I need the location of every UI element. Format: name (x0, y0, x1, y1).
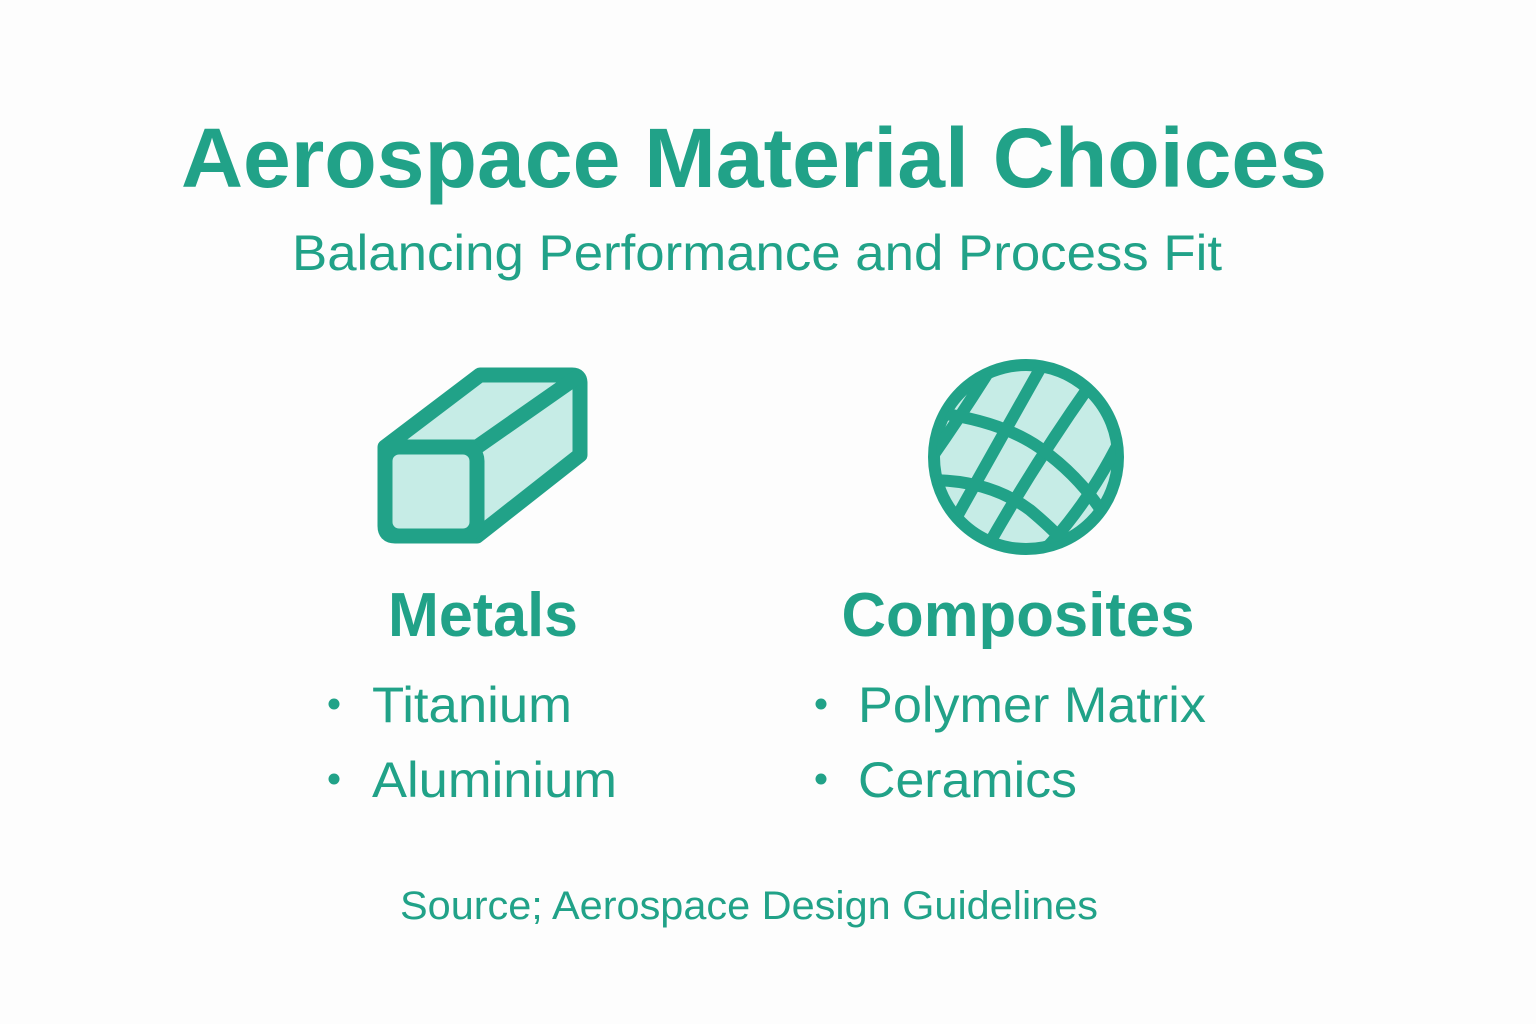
list: composites: Ceramics (858, 752, 1077, 808)
list: metals: Titanium (372, 677, 572, 733)
icon: composite globe (930, 360, 1120, 560)
list: metals (328, 677, 617, 808)
source: Source; Aerospace Design Guidelines (400, 884, 1098, 928)
icon: metal bar (385, 375, 580, 536)
list: metals: Aluminium (372, 752, 617, 808)
list: composites: Polymer Matrix (858, 677, 1206, 733)
heading: Metals: Metals (388, 581, 578, 650)
title: Aerospace Material Choices (181, 111, 1327, 205)
list: composites (816, 677, 1206, 808)
subtitle: Balancing Performance and Process Fit (292, 225, 1222, 281)
heading: Composites: Composites (842, 581, 1194, 650)
